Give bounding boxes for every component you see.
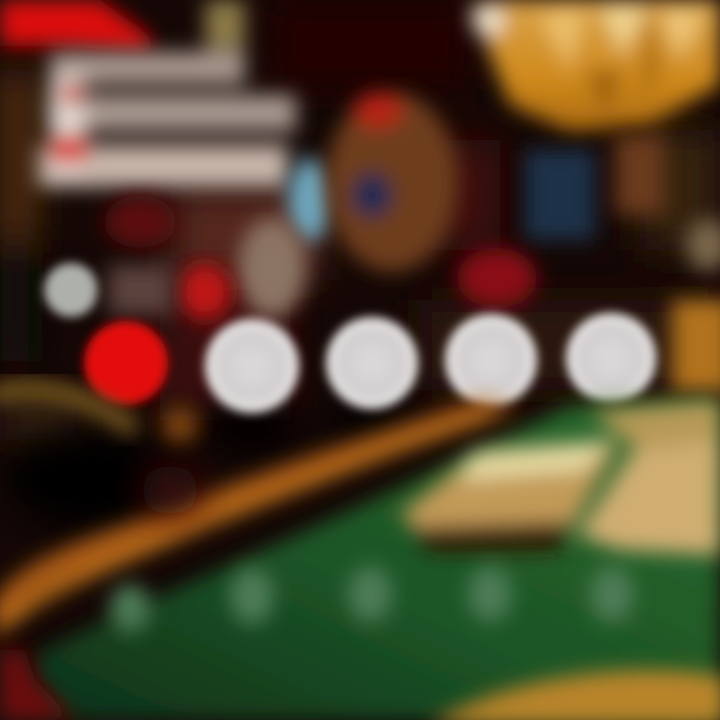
chip 3 [445, 314, 537, 406]
tower sign: white blocks [38, 0, 296, 187]
blue glass blob [288, 158, 332, 242]
small orange chip [162, 407, 198, 443]
beige figure [238, 218, 306, 318]
felt spot 1 [110, 584, 150, 632]
gold arc left [0, 390, 135, 430]
felt spot 2 [230, 568, 274, 624]
red glow [179, 264, 231, 320]
gold object bottom right [430, 670, 720, 720]
round wooden emblem [326, 92, 458, 272]
table felt [35, 400, 720, 720]
red table edge [0, 650, 75, 720]
chip 2 [326, 317, 418, 409]
pale chips on felt [110, 566, 634, 632]
white chips row [205, 313, 656, 413]
dark red glow under chips [140, 465, 200, 515]
grey block [108, 265, 173, 315]
chip 4 [566, 313, 656, 403]
chip 1 [205, 319, 299, 413]
felt spot 5 [590, 566, 634, 622]
background tones [0, 0, 720, 440]
felt spot 3 [348, 566, 392, 622]
red banner top left [0, 0, 150, 52]
grey chip [44, 263, 98, 317]
cream card stacks [400, 400, 720, 555]
blue and brown background shapes [525, 135, 665, 240]
orange wooden table rim [0, 400, 520, 650]
dark red mass [104, 196, 176, 248]
red chip [84, 321, 168, 405]
pale shape right [686, 219, 720, 271]
orange pillar right [672, 300, 720, 392]
felt spot 4 [468, 566, 512, 622]
golden crown top right [470, 0, 720, 132]
chip shadows [5, 397, 417, 528]
dark red dome [457, 248, 537, 308]
